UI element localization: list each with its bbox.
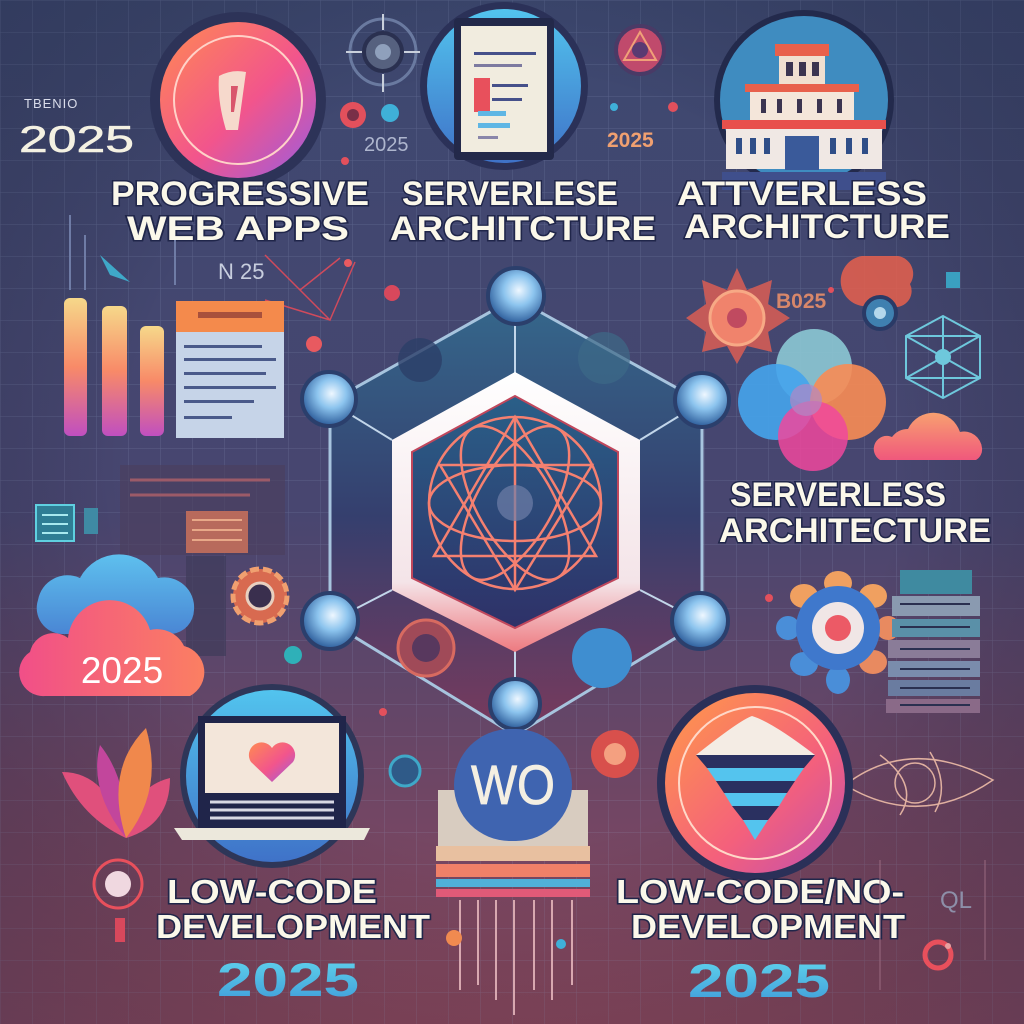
small label: top left year: 2025 xyxy=(19,119,134,160)
icon: cloud with 2025 xyxy=(19,554,204,696)
decorative dots and small year: 2025 xyxy=(364,134,408,156)
icon: WO stack: WO xyxy=(471,753,555,816)
panel: serverless architecture top xyxy=(390,2,656,248)
icon: top right small emblem xyxy=(607,26,678,152)
icon: progressive web apps badge xyxy=(150,12,326,188)
icon: flower gear, left xyxy=(233,569,302,664)
year: 2025 right: 2025 xyxy=(688,954,830,1007)
icon: small gear top centre xyxy=(346,14,420,92)
node xyxy=(490,679,540,729)
node xyxy=(302,593,358,649)
heading: progressive web apps: WEB APPS xyxy=(127,210,349,248)
heading: serverless architecture right: ARCHITECTURE xyxy=(719,512,991,550)
icon: petal gear right xyxy=(765,571,900,694)
panel: attverless architecture xyxy=(677,10,950,246)
icon: low-code funnel badge xyxy=(657,685,853,881)
heading: attverless architecture: ARCHITCTURE xyxy=(684,208,950,246)
outer hexagon xyxy=(330,298,702,735)
small label: top left year: TBENIO xyxy=(24,96,78,111)
inner hexagon frame xyxy=(392,372,640,652)
decorative line chart, mid left xyxy=(70,215,400,352)
small label: QL: QL xyxy=(940,887,972,914)
heading: serverless architecture top: ARCHITCTURE xyxy=(390,210,656,248)
decorative dots near WO xyxy=(379,708,639,786)
central hexagon diagram xyxy=(302,268,729,735)
icon: lotus xyxy=(62,728,170,838)
node xyxy=(488,268,544,324)
icon: building xyxy=(714,10,894,190)
bar chart: gradient bars xyxy=(64,298,164,436)
heading: progressive web apps: PROGRESSIVE xyxy=(111,175,369,213)
decorative machinery, left middle xyxy=(36,465,285,656)
node xyxy=(302,372,356,426)
icon: WO stack xyxy=(436,729,590,1015)
heading: attverless architecture: ATTVERLESS xyxy=(677,175,927,213)
icon: low-code laptop xyxy=(174,684,370,868)
node xyxy=(672,593,728,649)
icon: top right small emblem: 2025 xyxy=(607,129,654,152)
icon: atom network xyxy=(429,410,601,596)
heading: low-code development: LOW-CODE xyxy=(167,873,377,910)
icon: target ring xyxy=(94,860,142,942)
icon: tablet with document xyxy=(420,2,588,170)
icon: orange cloud xyxy=(874,413,982,460)
icon: network polyhedron xyxy=(906,316,980,398)
heading: low-code/no development: LOW-CODE/NO- xyxy=(616,873,904,910)
panel: progressive web apps xyxy=(111,12,369,248)
icon: outline eye xyxy=(845,752,993,815)
decorative dots and small year xyxy=(340,102,408,165)
icon: sun gear right top xyxy=(686,256,960,364)
document card xyxy=(176,301,284,438)
icon: cloud with 2025: 2025 xyxy=(81,650,163,691)
heading: low-code development: DEVELOPMENT xyxy=(156,908,430,945)
heading: serverless architecture right: SERVERLESS xyxy=(730,476,946,514)
small label: top left year xyxy=(19,96,134,160)
heading: low-code/no development: DEVELOPMENT xyxy=(631,908,905,945)
node xyxy=(675,373,729,427)
decorative dots bottom right xyxy=(880,860,985,990)
icon: server stack xyxy=(886,570,980,713)
decorative line chart, mid left: N 25 xyxy=(218,259,264,284)
icon: sun gear right top: B025 xyxy=(776,290,827,313)
icon: overlapping circles venn xyxy=(738,329,886,471)
year: 2025 left: 2025 xyxy=(217,953,359,1006)
heading: serverless architecture top: SERVERLESE xyxy=(402,175,618,213)
